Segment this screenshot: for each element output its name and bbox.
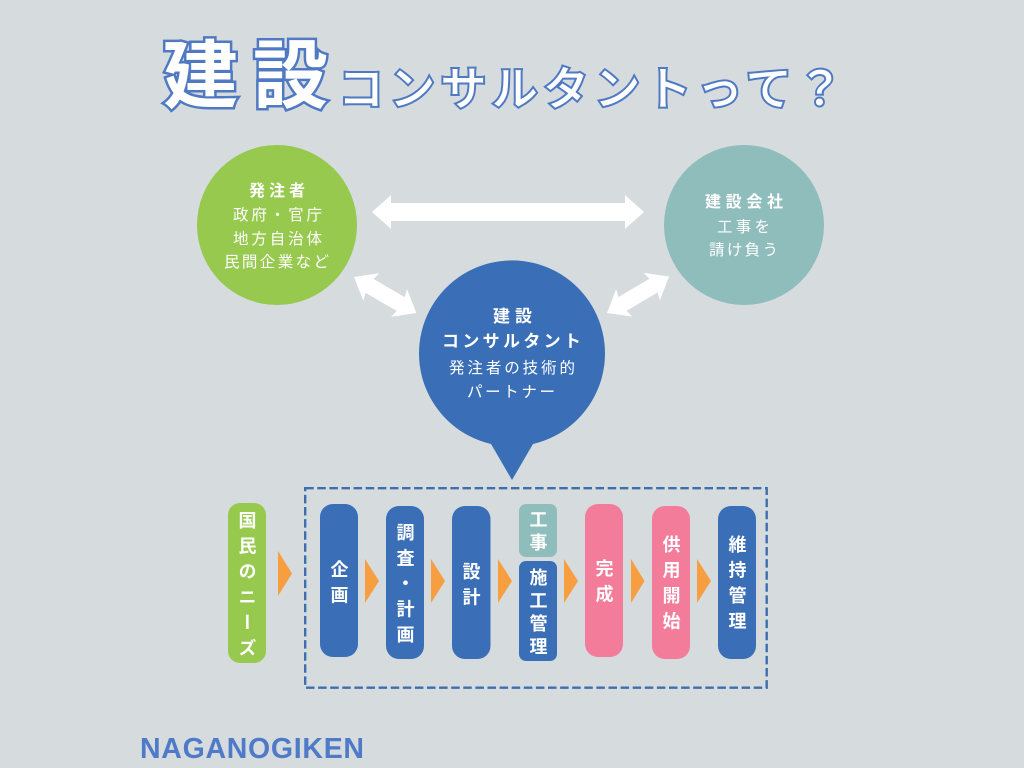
panel: consultant speech bubble: 建設 — [493, 307, 532, 326]
panel: client circle: 発注者 — [249, 182, 305, 200]
panel: client circle — [197, 145, 357, 305]
arrow: client to consultant — [346, 263, 424, 327]
step: design — [452, 506, 490, 659]
step: public needs: 国民のニーズ — [236, 511, 256, 664]
step: maintenance — [718, 506, 756, 659]
dashed process frame — [305, 488, 767, 688]
panel: construction company circle: 請け負う — [709, 241, 778, 259]
step: service start: 供用開始 — [660, 535, 680, 637]
panel: construction company circle — [664, 145, 824, 305]
arrow: consultant to company — [599, 263, 677, 327]
arrow: completion to service start — [631, 559, 644, 603]
step: construction management — [519, 561, 557, 661]
step: construction — [519, 504, 557, 557]
step: survey and plan: 調査・計画 — [394, 523, 414, 650]
step: planning: 企画 — [328, 560, 348, 611]
step: service start — [652, 506, 690, 659]
arrow: design to construction — [498, 559, 512, 603]
step: completion: 完成 — [594, 559, 614, 610]
arrow: planning to survey — [365, 559, 379, 603]
panel: consultant speech bubble — [419, 260, 605, 480]
panel: construction company circle: 建設会社 — [705, 193, 783, 211]
arrow: construction to completion — [564, 559, 578, 603]
step: completion — [585, 504, 623, 657]
panel: client circle: 民間企業など — [224, 253, 329, 271]
step: planning — [320, 504, 358, 657]
arrow: survey to design — [431, 559, 445, 603]
panel: consultant speech bubble: 発注者の技術的 — [449, 359, 575, 377]
step: maintenance: 維持管理 — [726, 535, 746, 637]
arrow: service start to maintenance — [697, 559, 711, 603]
step: public needs — [228, 503, 266, 664]
panel: client circle: 政府・官庁 — [233, 206, 322, 224]
step: design: 設計 — [460, 562, 480, 613]
arrow: needs to planning — [278, 551, 292, 596]
panel: consultant speech bubble: コンサルタント — [442, 332, 581, 351]
panel: client circle: 地方自治体 — [233, 230, 322, 248]
panel: construction company circle: 工事を — [717, 218, 770, 236]
step: construction: 工事 — [528, 510, 548, 556]
arrow: client to company — [372, 195, 644, 229]
step: survey and plan — [386, 506, 424, 659]
panel: consultant speech bubble: パートナー — [467, 384, 555, 401]
title — [163, 34, 843, 118]
title: コンサルタントって？ — [338, 63, 843, 115]
title: 建設 — [163, 34, 328, 118]
step: construction management: 施工管理 — [528, 568, 548, 660]
logo text: NAGANOGIKEN — [140, 733, 364, 765]
